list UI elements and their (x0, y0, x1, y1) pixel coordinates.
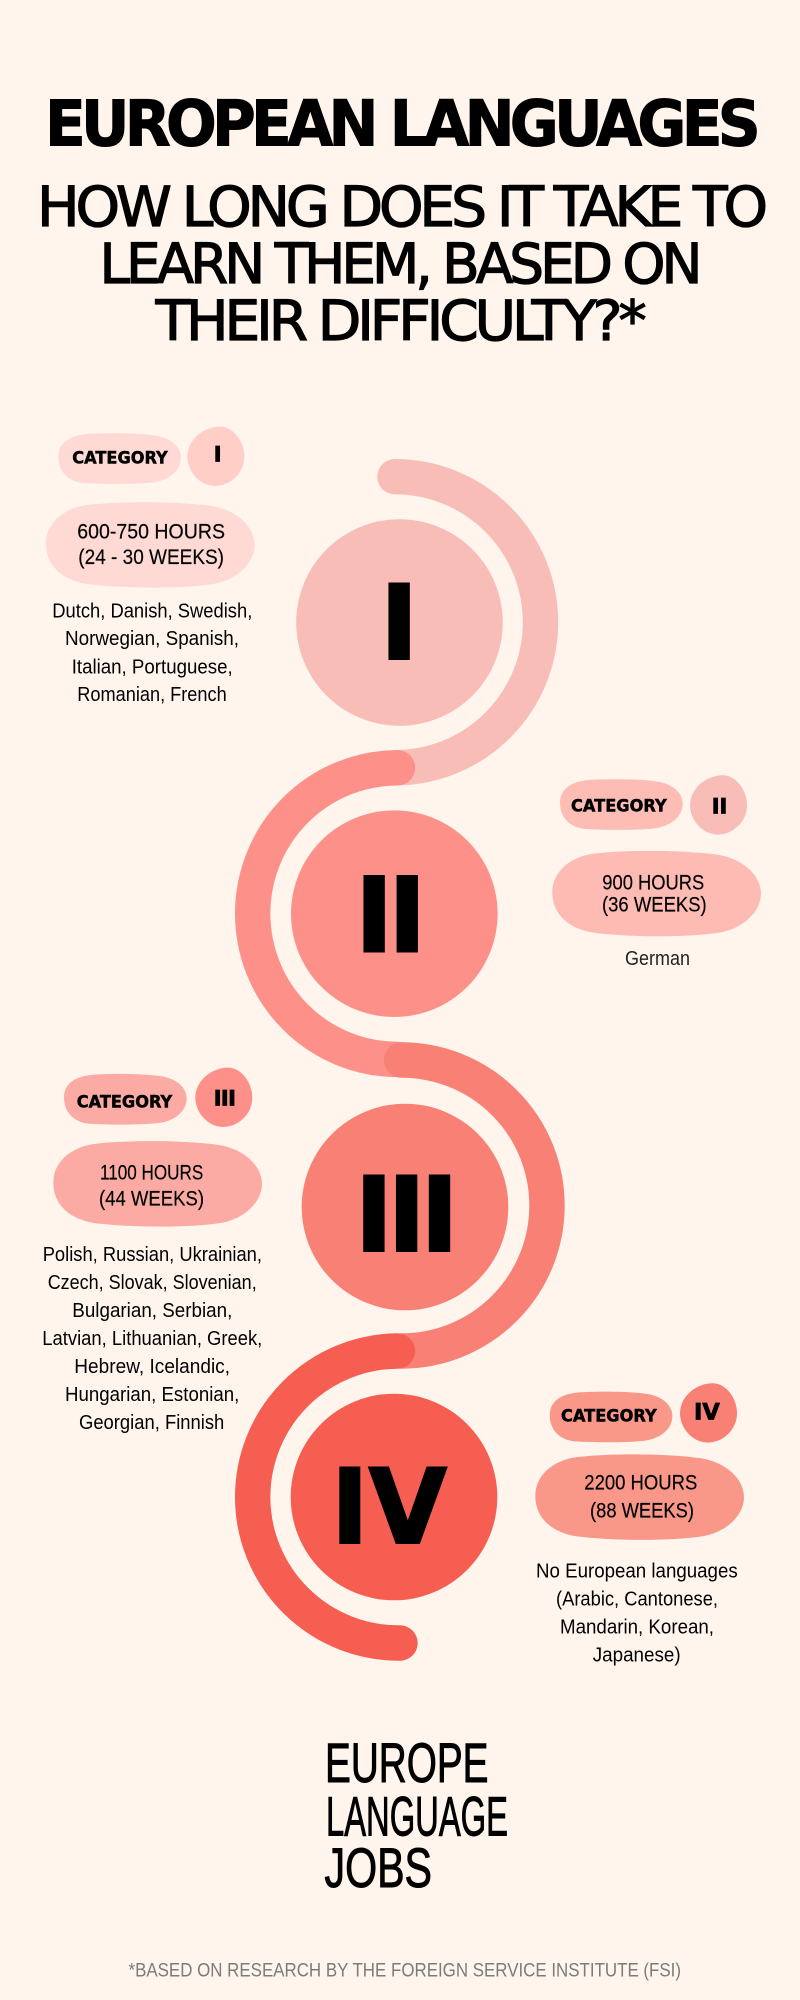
small circle (680, 1383, 737, 1443)
category pill (550, 1392, 672, 1442)
logo: Europe Language Jobs: EUROPE (325, 1731, 488, 1794)
language list: Japanese) (593, 1644, 681, 1666)
language list: Hungarian, Estonian, (65, 1384, 239, 1406)
language list: Romanian, French (77, 684, 227, 706)
circle: category I (296, 519, 503, 726)
category pill (560, 779, 683, 830)
hours blob (552, 851, 761, 936)
small numeral: III (214, 1086, 235, 1110)
numeral I: I (380, 564, 418, 684)
subtitle: LEARN THEM, BASED ON (100, 232, 698, 296)
logo: Europe Language Jobs: LANGUAGE (326, 1785, 508, 1848)
circle: category III (302, 1104, 508, 1310)
small circle (187, 427, 244, 486)
category I group (46, 427, 540, 768)
language list: German (625, 948, 690, 970)
category pill (64, 1074, 187, 1125)
hours text (99, 1161, 204, 1210)
language list (536, 1560, 738, 1666)
arc: category III (402, 1060, 547, 1351)
hours text (77, 520, 225, 569)
language list: Italian, Portuguese, (72, 656, 233, 678)
small numeral: IV (694, 1399, 720, 1425)
language list: (Arabic, Cantonese, (556, 1588, 718, 1610)
title: EUROPEAN LANGUAGES (45, 88, 757, 161)
language list: Bulgarian, Serbian, (72, 1300, 232, 1322)
hours text: 2200 HOURS (584, 1471, 697, 1494)
language list: Norwegian, Spanish, (65, 628, 239, 650)
language list: No European languages (536, 1560, 738, 1582)
hours blob (535, 1454, 744, 1540)
panel: category II details (552, 775, 761, 970)
category label: CATEGORY (72, 448, 168, 468)
category IV group (253, 1351, 744, 1666)
arc: category IV (253, 1351, 400, 1643)
language list: Hebrew, Icelandic, (74, 1356, 230, 1378)
language list: Czech, Slovak, Slovenian, (48, 1272, 257, 1294)
category II group (253, 768, 761, 1059)
language list (42, 1244, 262, 1434)
hours text (584, 1471, 697, 1522)
hours text: (24 - 30 WEEKS) (78, 546, 224, 569)
category label: CATEGORY (561, 1407, 657, 1427)
category label: CATEGORY (77, 1093, 173, 1113)
numeral III: III (355, 1156, 453, 1276)
arc: category I (395, 477, 540, 768)
language list: Dutch, Danish, Swedish, (52, 600, 252, 622)
hours text: (44 WEEKS) (99, 1187, 204, 1210)
logo: Europe Language Jobs: JOBS (324, 1836, 432, 1899)
language list: Mandarin, Korean, (560, 1616, 714, 1638)
hours text: (36 WEEKS) (602, 894, 707, 917)
hours text: 900 HOURS (602, 871, 704, 894)
category pill (58, 433, 181, 484)
small circle (690, 775, 747, 835)
small numeral: II (712, 795, 727, 819)
logo: Europe Language Jobs (324, 1731, 508, 1899)
language list (52, 600, 252, 706)
hours blob (53, 1141, 262, 1227)
numeral II: II (355, 857, 421, 977)
circle: category IV (291, 1394, 497, 1600)
arc: category II (253, 768, 398, 1059)
language list: Georgian, Finnish (79, 1412, 224, 1434)
subtitle: THEIR DIFFICULTY?* (155, 289, 645, 353)
panel: category IV details (535, 1383, 744, 1666)
category label: CATEGORY (571, 797, 667, 817)
hours blob (46, 502, 255, 588)
subtitle (37, 175, 766, 353)
subtitle: HOW LONG DOES IT TAKE TO (37, 175, 766, 239)
hours text: 1100 HOURS (100, 1161, 203, 1184)
hours text: (88 WEEKS) (590, 1499, 694, 1522)
footnote: *BASED ON RESEARCH BY THE FOREIGN SERVICE INSTITUTE (FSI) (128, 1960, 681, 1982)
language list: Polish, Russian, Ukrainian, (43, 1244, 262, 1266)
category III group (42, 1060, 547, 1434)
numeral IV: IV (331, 1448, 447, 1568)
hours text: 600-750 HOURS (77, 520, 225, 543)
small numeral: I (214, 442, 222, 466)
circle: category II (291, 810, 498, 1017)
language list: Latvian, Lithuanian, Greek, (42, 1328, 262, 1350)
panel: category I details (46, 427, 255, 706)
hours text (602, 871, 707, 917)
small circle (195, 1068, 252, 1127)
panel: category III details (42, 1068, 262, 1434)
